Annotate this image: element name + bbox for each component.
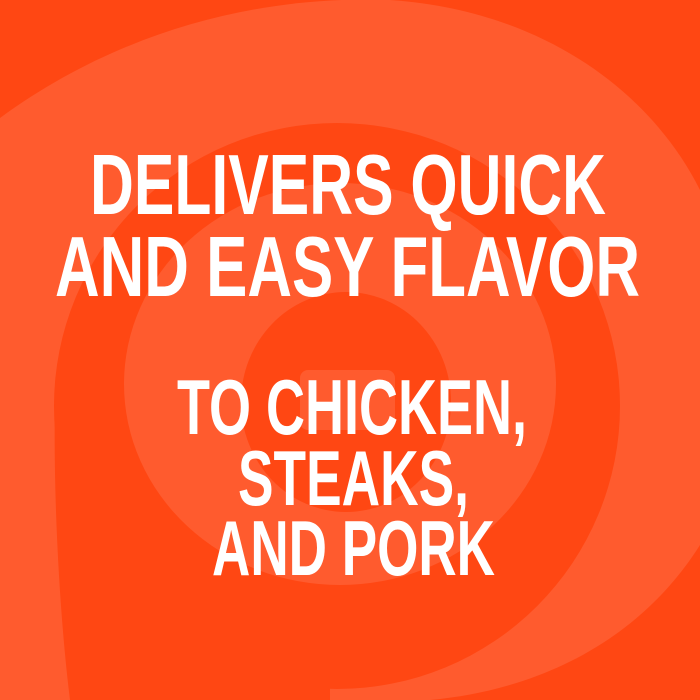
subheadline — [177, 363, 527, 592]
subheadline: STEAKS, — [238, 434, 469, 522]
headline — [55, 138, 640, 315]
subheadline: TO CHICKEN, — [177, 363, 527, 451]
subheadline: AND PORK — [212, 504, 495, 592]
